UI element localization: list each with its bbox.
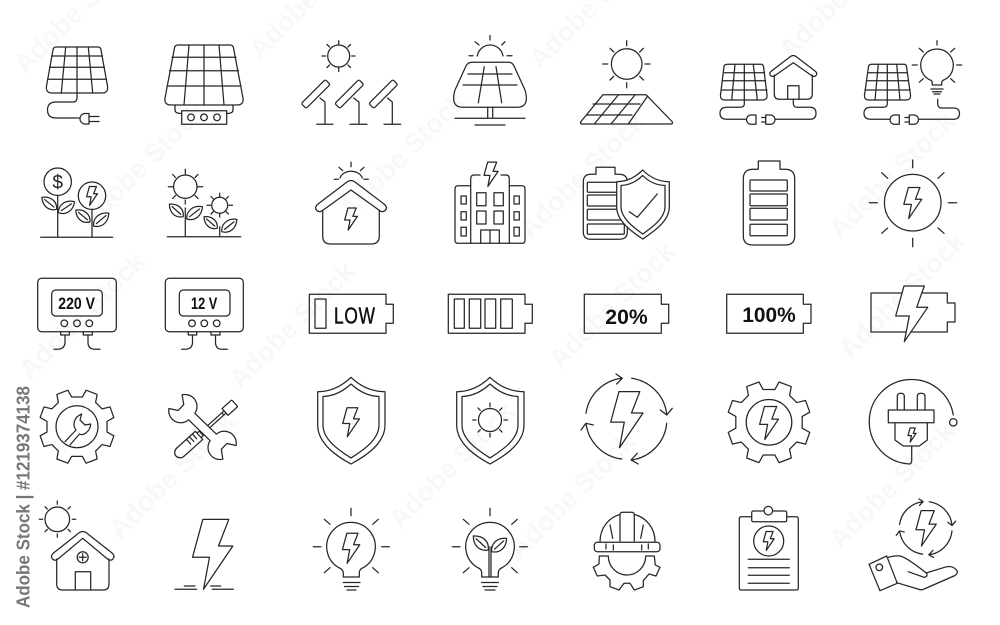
watermark pattern: Adobe Stock [13,246,152,384]
icon: sun and three tilted panels [301,41,401,124]
icon: house with sun [39,501,114,590]
watermark pattern: Adobe Stock [823,416,962,554]
icon: full battery horizontal [448,294,532,333]
icon: energy sun [869,160,957,247]
icon: charging battery [871,286,955,342]
icon: 12 V inverter [165,278,243,349]
label: 220 V: 220 V [58,294,96,313]
icon: engineer helmet with gear [593,512,660,590]
watermark pattern: Adobe Stock [103,406,242,544]
icon: gear with wrench [40,390,114,463]
icon: lightning strike [175,519,233,589]
label: 100%: 100% [742,304,796,327]
icon: solar panel with plug [46,47,108,124]
label: LOW: LOW [334,302,376,328]
watermark pattern: Adobe Stock [543,236,682,374]
icon: crossed wrench and screwdriver [165,390,240,464]
watermark pattern: Adobe Stock [503,426,642,564]
vertical stock id text: Adobe Stock | #1219374138 [14,386,34,608]
icon: sun over roof panel [580,41,672,124]
icon: clipboard report [739,506,798,590]
icon: money and energy plants: $ [52,172,63,194]
icon: panel connected to house with plugs [720,56,817,124]
watermark pattern: Adobe Stock [333,86,472,224]
icon: panel connected to light bulb [864,41,962,124]
screwdriver [172,399,238,460]
icon: battery 20% [584,294,669,333]
icon: hand holding energy cycle [869,499,957,591]
icon: light bulb with bolt [313,508,389,590]
watermark pattern: Adobe Stock [833,226,972,364]
icon: office building with bolt [455,162,525,243]
icon: full battery [743,161,795,245]
icon: battery with shield [583,167,669,239]
watermark pattern: Adobe Stock [513,106,652,244]
icon: house with sun and bolt [316,162,386,244]
icon: low battery [309,294,393,333]
icon: battery 100% [727,294,811,333]
icon: energy cycle [581,374,672,464]
label: 20%: 20% [605,306,648,329]
icon: money and energy plants [39,168,113,237]
watermark pattern: Adobe Stock [223,256,362,394]
wrench [165,390,240,464]
icon: gear with bolt [728,382,810,463]
icon: solar panel with controller [165,45,243,124]
watermark pattern: Adobe Stock [823,106,962,244]
icon: 220 V inverter [38,278,116,349]
icon: shield with bolt [318,377,385,464]
watermark pattern: Adobe Stock [383,396,522,534]
icon: electric plug [869,379,957,464]
icon: sun over round solar panel on stand [454,36,526,125]
icon: plants with suns [166,169,241,237]
watermark pattern: Adobe Stock [73,96,212,234]
icon: light bulb with leaves [452,508,527,590]
icon: shield with sun [457,377,524,464]
label: 12 V: 12 V [191,294,218,313]
